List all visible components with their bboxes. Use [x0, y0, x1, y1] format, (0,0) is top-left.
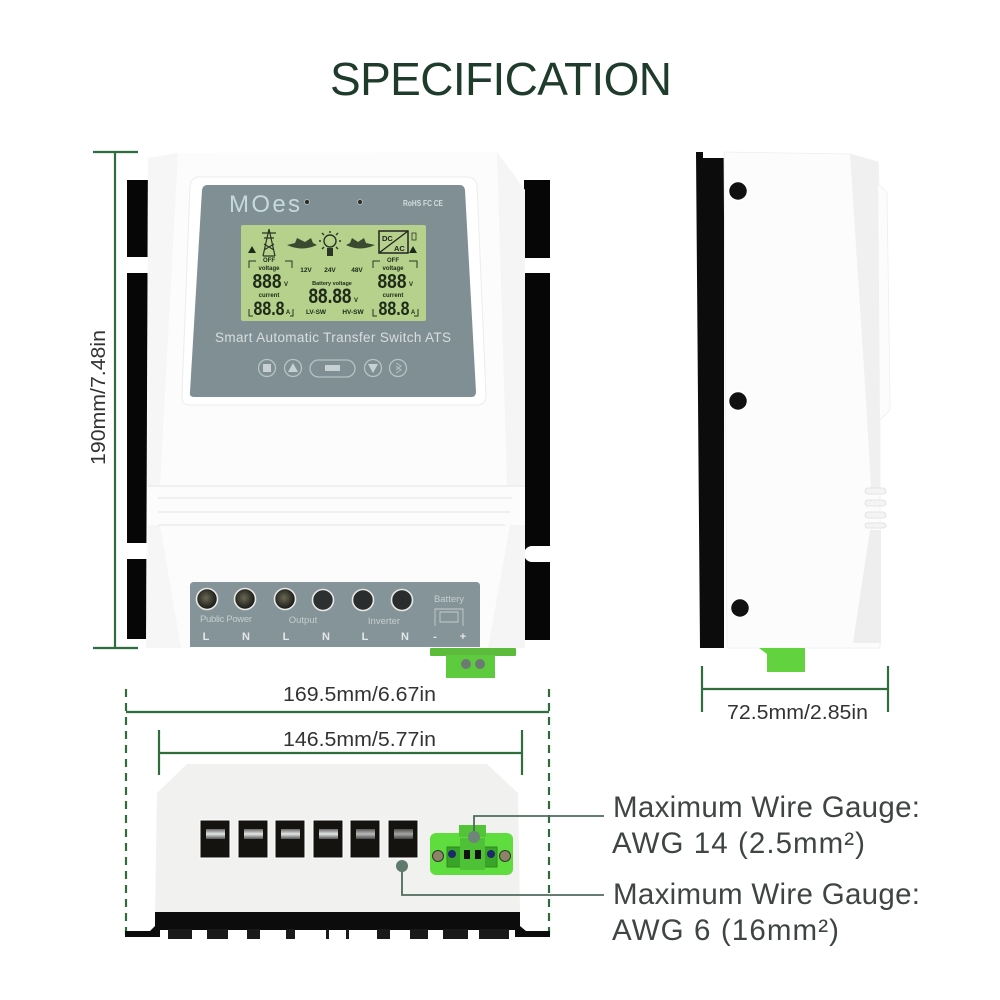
green connector [759, 648, 805, 672]
LCD readings: 24V [324, 267, 336, 274]
LCD screen [241, 225, 426, 321]
icon: pylon [262, 229, 276, 256]
product name: Smart Automatic Transfer Switch ATS [215, 330, 451, 345]
certification marks: RoHS FC CE [403, 199, 444, 208]
LCD readings: V [409, 282, 413, 288]
icon: bulb [319, 231, 341, 256]
terminal panel: + [460, 631, 466, 643]
LCD readings: voltage [382, 266, 404, 272]
terminal labels: Inverter [368, 616, 400, 627]
side view of device [696, 152, 890, 672]
title: SPECIFICATION [330, 53, 672, 105]
LCD readings: voltage [258, 266, 280, 272]
terminal panel: N [242, 631, 250, 643]
callout: AWG 14 [468, 791, 920, 860]
green connector [430, 825, 513, 875]
icon: DC AC box: DC [382, 234, 393, 243]
dimension: height 190mm: 190mm/7.48in [88, 330, 110, 465]
LCD readings: 12V [300, 267, 312, 274]
LCD readings: HV-SW [342, 309, 365, 316]
icon: DC AC box [379, 231, 408, 253]
LCD readings: V [284, 282, 288, 288]
terminal panel: - [433, 631, 437, 643]
icon: battery [435, 609, 463, 626]
terminal labels: Output [289, 615, 318, 626]
LCD readings: A [411, 310, 416, 316]
icon: left flow [287, 238, 317, 248]
display panel [190, 185, 476, 397]
terminal screws [196, 588, 412, 610]
LCD readings: OFF [263, 258, 275, 264]
icon: right triangle [409, 246, 417, 253]
LCD readings: 888 [378, 271, 406, 293]
LCD brackets [249, 261, 418, 316]
icon: DC AC box: AC [394, 244, 405, 253]
LCD readings: 88.8 [254, 299, 284, 320]
icon: small battery [412, 233, 416, 240]
terminal labels: Public Power [200, 614, 252, 625]
panel buttons [258, 360, 406, 377]
rear bracket [696, 152, 724, 648]
callout: AWG 6 [396, 860, 920, 947]
LCD readings: LV-SW [306, 309, 327, 316]
body ribs [148, 486, 525, 525]
display panel frame [182, 177, 486, 405]
LCD readings: OFF [387, 258, 399, 264]
dimension: depth 72.5mm [702, 666, 888, 724]
callout: AWG 6: AWG 6 (16mm²) [612, 914, 839, 947]
mounting brackets [127, 180, 550, 640]
LCD readings: V [354, 298, 358, 304]
LCD readings: 88.88 [308, 285, 352, 308]
terminal panel: N [401, 631, 409, 643]
LCD readings: Battery voltage [312, 281, 352, 287]
device body [146, 152, 525, 648]
dimension: body width 146.5mm: 146.5mm/5.77in [283, 729, 436, 751]
icon: right flow [346, 238, 375, 248]
LCD readings: current [383, 293, 403, 299]
base with teeth [125, 912, 550, 939]
terminal panel [190, 582, 480, 647]
LCD readings: current [259, 293, 279, 299]
terminal labels [200, 594, 464, 627]
LCD readings: 888 [252, 271, 282, 293]
callout: AWG 6: Maximum Wire Gauge: [613, 878, 920, 911]
dimension: overall width 169.5mm [126, 684, 549, 935]
terminal panel: L [362, 631, 369, 643]
wire terminals [200, 820, 418, 858]
sensor dots [304, 200, 362, 204]
LCD readings: 88.8 [378, 299, 410, 320]
bottom view of device [125, 764, 550, 939]
LCD readings: A [286, 310, 291, 316]
callout: AWG 14: Maximum Wire Gauge: [613, 791, 920, 824]
terminal labels: Battery [434, 594, 464, 605]
LCD readings: 48V [351, 267, 363, 274]
side ribs [865, 488, 886, 528]
side shading [850, 154, 880, 488]
dimension: body width 146.5mm [159, 729, 522, 775]
green battery connector [430, 648, 516, 678]
LCD readings [252, 258, 416, 320]
dimension: height 190mm [88, 152, 138, 648]
side screws [728, 182, 750, 618]
terminal panel: L [283, 631, 290, 643]
terminal panel: L [203, 631, 210, 643]
callout: AWG 14: AWG 14 (2.5mm²) [612, 827, 865, 860]
icon: left triangle [248, 246, 256, 253]
dimension: overall width 169.5mm: 169.5mm/6.67in [283, 684, 436, 706]
dimension: depth 72.5mm: 72.5mm/2.85in [727, 702, 868, 724]
terminal panel: N [322, 631, 330, 643]
logo: MOes [229, 191, 300, 218]
side body [724, 152, 890, 648]
front view of device [127, 152, 550, 678]
bottom body [155, 764, 520, 912]
